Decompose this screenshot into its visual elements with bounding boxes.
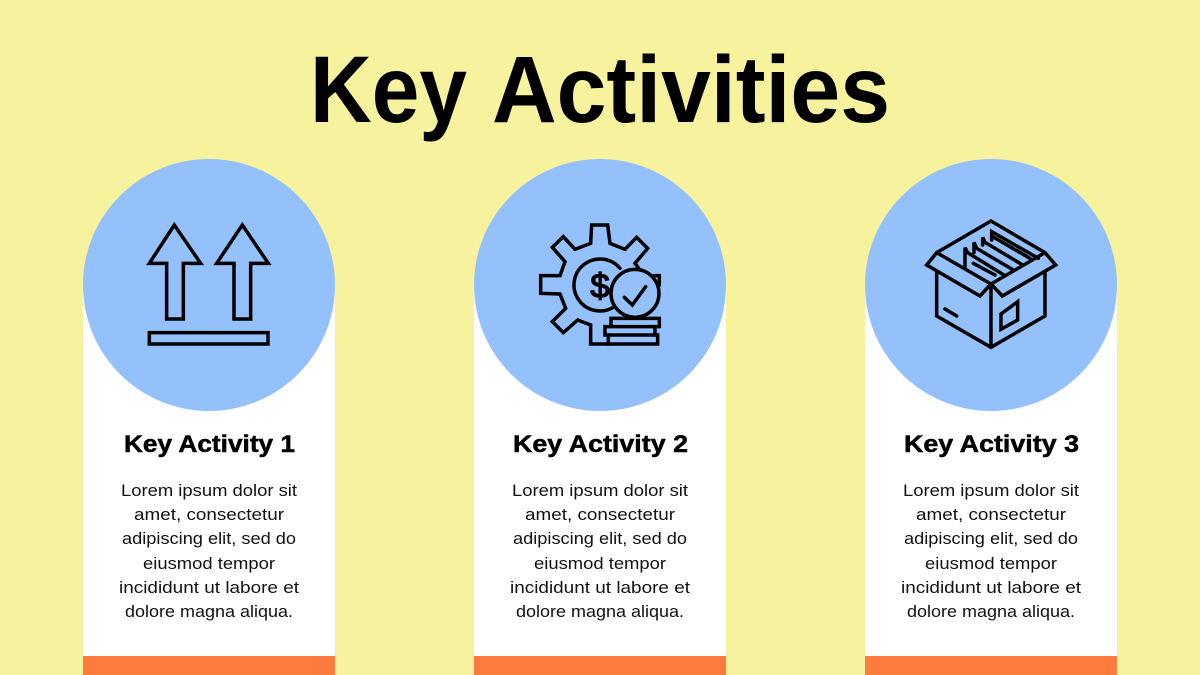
heading: Key Activity 3 xyxy=(904,431,1079,458)
body text xyxy=(901,481,1081,621)
icon: two upward arrows xyxy=(149,225,268,344)
title: Key xyxy=(310,37,467,143)
icon: gear with dollar coin and check: $ xyxy=(590,267,610,305)
card background xyxy=(83,285,335,675)
title: Activities xyxy=(492,37,890,143)
body text xyxy=(510,481,690,621)
body text: amet, consectetur xyxy=(916,505,1066,524)
card footer bar xyxy=(865,656,1117,675)
icon circle xyxy=(474,159,726,411)
body text: dolore magna aliqua. xyxy=(516,602,684,621)
body text: adipiscing elit, sed do xyxy=(904,529,1078,548)
heading: Key Activity 2 xyxy=(513,431,688,458)
body text: Lorem ipsum dolor sit xyxy=(512,481,688,500)
body text xyxy=(119,481,299,621)
icon circle xyxy=(865,159,1117,411)
body text: adipiscing elit, sed do xyxy=(513,529,687,548)
heading: Key Activity 1 xyxy=(124,431,295,458)
body text: adipiscing elit, sed do xyxy=(122,529,296,548)
icon: open box with files xyxy=(927,221,1056,347)
icon circle xyxy=(83,159,335,411)
card background xyxy=(474,285,726,675)
body text: Lorem ipsum dolor sit xyxy=(903,481,1079,500)
body text: dolore magna aliqua. xyxy=(907,602,1075,621)
card footer bar xyxy=(83,656,335,675)
panel: key activity 3 xyxy=(865,159,1117,675)
panel: key activity 2 xyxy=(474,159,726,675)
body text: eiusmod tempor xyxy=(925,554,1057,573)
body text: amet, consectetur xyxy=(134,505,284,524)
panel: key activity 1 xyxy=(83,159,335,675)
body text: Lorem ipsum dolor sit xyxy=(121,481,297,500)
card background xyxy=(865,285,1117,675)
icon: gear with dollar coin and check xyxy=(541,225,659,344)
body text: eiusmod tempor xyxy=(534,554,666,573)
body text: incididunt ut labore et xyxy=(119,578,299,597)
body text: incididunt ut labore et xyxy=(510,578,690,597)
body text: eiusmod tempor xyxy=(143,554,275,573)
body text: amet, consectetur xyxy=(525,505,675,524)
body text: dolore magna aliqua. xyxy=(125,602,293,621)
card footer bar xyxy=(474,656,726,675)
body text: incididunt ut labore et xyxy=(901,578,1081,597)
